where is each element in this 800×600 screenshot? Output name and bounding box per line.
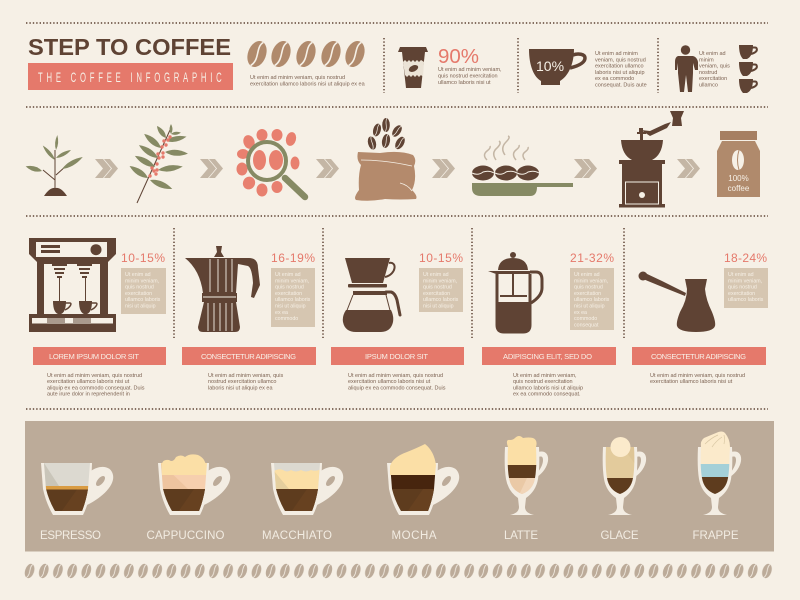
stat: takeaway cup 90%: 90% — [438, 45, 479, 68]
note box: carafe — [419, 268, 463, 312]
banner: moka — [182, 347, 316, 365]
description: machine: Ut enim ad minim veniam, quis nostrud — [47, 373, 142, 379]
icon: coffee bag — [717, 131, 760, 197]
stat: person and cups: ullamco — [699, 82, 718, 88]
drink: macchiato: MACCHIATO — [262, 530, 332, 542]
drink: espresso — [40, 463, 113, 542]
stat: mug 10%: veniam, quis nostrud — [595, 57, 646, 63]
note box: carafe: Ut enim ad — [423, 272, 449, 278]
panel: coffee types — [25, 421, 774, 552]
banner: turkish pot: CONSECTETUR ADIPISCING — [651, 352, 746, 361]
note box: press: commodo — [574, 316, 597, 322]
icon: coffee bag: coffee — [728, 184, 750, 193]
arrow — [95, 159, 118, 178]
banner: turkish pot — [632, 347, 766, 365]
stat: person and cups: minim — [699, 57, 714, 63]
note box: turkish pot: Ut enim ad — [728, 272, 754, 278]
icon: moka pot — [185, 246, 260, 332]
stat: mug 10%: consequat. Duis aute — [595, 82, 647, 88]
subtitle banner: THE COFFEE INFOGRAPHIC — [38, 71, 222, 86]
icon: coffee branch — [128, 124, 188, 203]
drink: latte — [504, 436, 548, 542]
note box: press: Ut enim ad — [574, 272, 600, 278]
drink: macchiato — [262, 463, 343, 542]
description: carafe: aliquip ex ea commodo consequat. Duis — [348, 385, 446, 391]
note box: press: exercitation — [574, 291, 601, 297]
arrow — [432, 159, 455, 178]
icon: magnifier over beans — [236, 129, 305, 197]
description: machine: aute irure dolor in reprehenderit in — [47, 392, 130, 398]
drink: glace: GLACE — [600, 530, 639, 542]
arrow — [200, 159, 223, 178]
drink: espresso: ESPRESSO — [40, 530, 101, 542]
description: moka: laboris nisi ut aliquip ex ea — [208, 385, 273, 391]
stat: person and cups: nostrud — [699, 70, 717, 76]
drink: cappuccino: CAPPUCCINO — [146, 530, 225, 542]
icon: seedling — [25, 135, 84, 196]
note box: moka: exercitation — [275, 291, 302, 297]
banner: press: ADIPISCING ELIT, SED DO — [503, 352, 592, 361]
icon: french press — [488, 252, 542, 332]
stat: takeaway cup 90%: ullamco laboris nisi ut — [438, 80, 491, 86]
description: press: Ut enim ad minim veniam, — [513, 373, 577, 379]
note box: machine: ullamco laboris — [125, 297, 161, 303]
arrow — [316, 159, 339, 178]
note box: press: consequat — [574, 322, 599, 328]
stat: mug 10%: exercitation ullamco — [595, 64, 644, 70]
note box: machine: minim veniam, — [125, 278, 159, 284]
stat: coffee beans: exercitation ullamco laboris nisi ut aliquip ex ea — [250, 81, 366, 87]
note box: moka: quis nostrud — [275, 285, 304, 291]
icon: roasting pan — [472, 136, 573, 196]
stat: takeaway cup 90%: quis nostrud exercitation — [438, 74, 498, 80]
subtitle banner — [28, 63, 233, 90]
note box: machine: quis nostrud — [125, 285, 154, 291]
percent: carafe: 10-15% — [419, 251, 463, 265]
icon: coffee grinder — [619, 111, 684, 208]
note box: carafe: ullamco laboris — [423, 297, 459, 303]
note box: press: minim veniam, — [574, 278, 608, 284]
note box: press: nisi ut aliquip — [574, 304, 605, 310]
stat: takeaway cup 90% — [398, 45, 502, 88]
note box: carafe: exercitation — [423, 291, 450, 297]
note box: moka: minim veniam, — [275, 278, 309, 284]
banner: moka: CONSECTETUR ADIPISCING — [201, 352, 296, 361]
description: turkish pot: Ut enim ad minim veniam, quis nostrud — [650, 373, 745, 379]
stat: mug 10%: ex ea commodo — [595, 76, 634, 82]
stat: person and cups: exercitation — [699, 76, 727, 82]
note box: turkish pot — [724, 268, 768, 308]
note box: machine: Ut enim ad — [125, 272, 151, 278]
note box: carafe: quis nostrud — [423, 285, 452, 291]
banner: carafe — [331, 347, 464, 365]
note box: machine: exercitation — [125, 291, 152, 297]
stat: person and cups: Ut enim ad — [699, 51, 726, 57]
note box: press: ullamco laboris — [574, 297, 610, 303]
stat: mug 10% — [529, 49, 647, 88]
note box: moka: Ut enim ad — [275, 272, 301, 278]
stat: person and cups — [675, 45, 757, 93]
note box: moka: ex ea — [275, 310, 288, 316]
note box: press — [570, 268, 614, 330]
note box: machine — [121, 268, 166, 314]
note box: press: quis nostrud — [574, 285, 603, 291]
banner: machine — [33, 347, 166, 365]
note box: turkish pot: exercitation — [728, 291, 755, 297]
description: press: ex ea commodo consequat. — [513, 392, 581, 398]
bean strip — [22, 563, 774, 579]
description: carafe: Ut enim ad minim veniam, quis nostrud — [348, 373, 443, 379]
percent: machine: 10-15% — [121, 251, 165, 265]
banner: carafe: IPSUM DOLOR SIT — [365, 352, 428, 361]
icon: coffee bag: 100% — [728, 174, 749, 183]
drink: latte: LATTE — [504, 530, 538, 542]
arrow — [677, 159, 700, 178]
description: press: quis nostrud exercitation — [513, 379, 573, 385]
note box: moka: nisi ut aliquip — [275, 304, 306, 310]
percent: turkish pot: 18-24% — [724, 251, 767, 265]
stat: mug 10%: 10% — [536, 58, 564, 74]
note box: turkish pot: minim veniam, — [728, 278, 762, 284]
stat: coffee beans — [244, 38, 368, 87]
icon: sack of beans — [355, 118, 416, 201]
note box: carafe: nisi ut aliquip — [423, 304, 454, 310]
arrow — [574, 159, 597, 178]
percent: moka: 16-19% — [271, 251, 315, 265]
title: STEP TO COFFEE — [28, 34, 231, 60]
icon: pour over carafe — [343, 258, 400, 332]
note box: carafe: minim veniam, — [423, 278, 457, 284]
note box: machine: nisi ut aliquip — [125, 304, 156, 310]
drink: frappe — [692, 432, 741, 542]
icon: espresso machine — [29, 238, 116, 332]
description: moka: Ut enim ad minim veniam, quis — [208, 373, 283, 379]
note box: moka — [271, 268, 315, 327]
note box: press: ex ea — [574, 310, 587, 316]
stat: person and cups: veniam, quis — [699, 64, 730, 70]
drink: frappe: FRAPPE — [692, 530, 739, 542]
note box: turkish pot: ullamco laboris — [728, 297, 764, 303]
percent: press: 21-32% — [570, 251, 614, 265]
note box: turkish pot: quis nostrud — [728, 285, 757, 291]
description: turkish pot: exercitation ullamco laboris nisi ut — [650, 379, 733, 385]
drink: mocha — [387, 444, 459, 542]
note box: moka: ullamco laboris — [275, 297, 311, 303]
drink: cappuccino — [146, 454, 230, 542]
stat: coffee beans: Ut enim ad minim veniam, quis nostrud — [250, 75, 345, 81]
stat: takeaway cup 90%: Ut enim ad minim veniam, — [438, 67, 502, 73]
banner: press — [482, 347, 616, 365]
drink: mocha: MOCHA — [392, 530, 437, 542]
icon: turkish pot — [638, 272, 715, 332]
note box: moka: commodo — [275, 316, 298, 322]
description: press: ullamco laboris nisi ut aliquip — [513, 385, 583, 391]
description: machine: aliquip ex ea commodo consequat. Duis — [47, 385, 145, 391]
drink: glace — [600, 437, 646, 542]
stat: mug 10%: Ut enim ad minim — [595, 51, 638, 57]
description: machine: exercitation ullamco laboris nisi ut — [47, 379, 130, 385]
description: carafe: exercitation ullamco laboris nisi ut — [348, 379, 431, 385]
description: moka: nostrud exercitation ullamco — [208, 379, 276, 385]
stat: mug 10%: laboris nisi ut aliquip — [595, 70, 645, 76]
banner: machine: LOREM IPSUM DOLOR SIT — [49, 352, 139, 361]
